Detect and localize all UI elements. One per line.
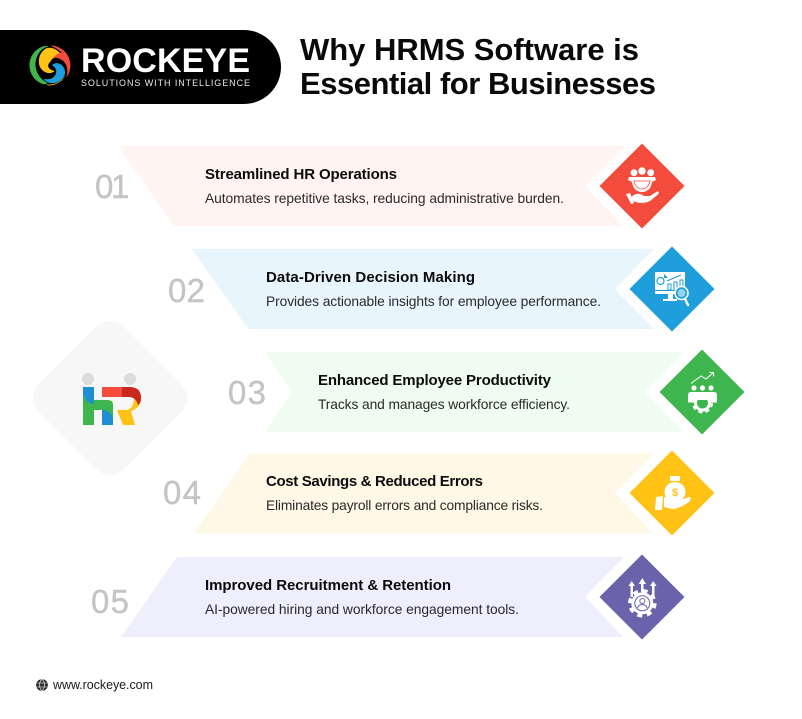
number: 04: [163, 474, 201, 511]
icon: logo swirl: [29, 45, 70, 86]
description: Automates repetitive tasks, reducing administrative burden.: [205, 191, 564, 206]
panel: step 3: [228, 350, 744, 434]
heading: Streamlined HR Operations: [205, 166, 397, 183]
panel: step 1: [95, 144, 684, 228]
band: [192, 249, 654, 329]
icon: savings diamond: [630, 450, 714, 536]
panel: step 2: [168, 246, 714, 332]
icon: HR logo: [82, 373, 141, 425]
band: [265, 352, 684, 432]
footer: website: [37, 678, 153, 692]
band: [194, 453, 654, 533]
heading: Data-Driven Decision Making: [266, 269, 475, 286]
icon: savings diamond: $: [672, 487, 678, 499]
description: Provides actionable insights for employee performance.: [266, 294, 601, 309]
band: [121, 557, 624, 637]
number: 03: [228, 374, 266, 411]
description: Eliminates payroll errors and compliance risks.: [266, 498, 543, 513]
number: 01: [95, 168, 129, 205]
panel: step 5: [91, 554, 684, 640]
description: Tracks and manages workforce efficiency.: [318, 397, 570, 412]
heading: Cost Savings & Reduced Errors: [266, 473, 483, 490]
icon: team care diamond: [600, 144, 684, 228]
description: AI-powered hiring and workforce engagement tools.: [205, 602, 519, 617]
title: Essential for Businesses: [300, 66, 656, 101]
title: [300, 32, 656, 101]
number: 02: [168, 272, 205, 309]
icon: productivity diamond: [660, 350, 744, 434]
icon: growth gear diamond: [600, 554, 684, 640]
icon: analytics diamond: [630, 246, 714, 332]
band: [118, 146, 625, 226]
logo wordmark: ROCKEYE: [81, 42, 250, 80]
heading: Enhanced Employee Productivity: [318, 372, 552, 389]
panel: step 4: [163, 450, 714, 536]
heading: Improved Recruitment & Retention: [205, 577, 451, 594]
number: 05: [91, 583, 129, 620]
website address: www.rockeye.com: [52, 678, 153, 692]
title: Why HRMS Software is: [300, 32, 639, 67]
panel: HR badge: [25, 313, 195, 483]
logo tagline: SOLUTIONS WITH INTELLIGENCE: [81, 78, 250, 88]
icon: globe: [37, 680, 47, 690]
logo badge: [0, 30, 281, 104]
